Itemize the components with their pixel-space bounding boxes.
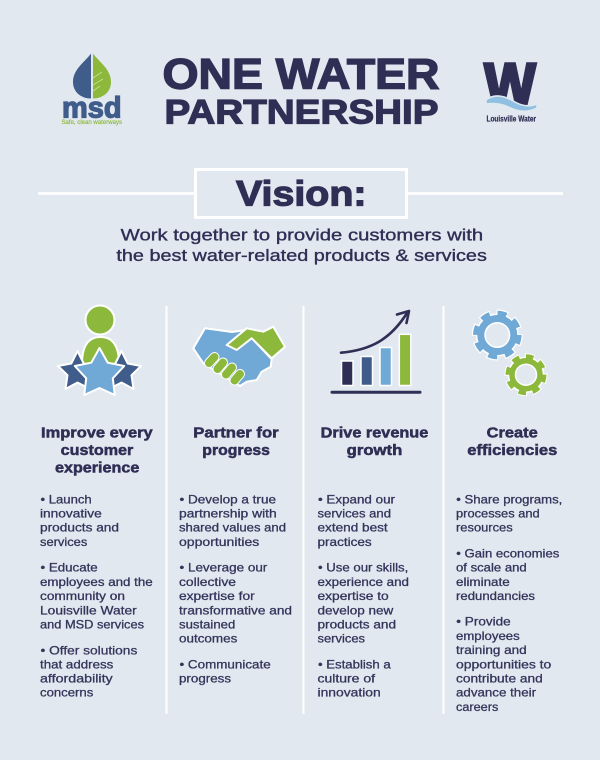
- heading: Drive revenue: [321, 426, 428, 442]
- bullet list: practices: [318, 535, 372, 549]
- heading: Create: [487, 426, 538, 442]
- heading: Improve every: [41, 426, 153, 442]
- green gear: [508, 357, 544, 393]
- panel: drive revenue growth: [318, 426, 428, 700]
- bullet list: contribute and: [456, 672, 543, 686]
- bullet list: extend best: [318, 521, 388, 535]
- heading: Partner for: [193, 426, 279, 442]
- bullet list: resources: [456, 521, 513, 535]
- bullet list: employees: [456, 629, 520, 643]
- icon: person with stars: [58, 306, 141, 395]
- bullet list: shared values and: [179, 521, 286, 535]
- icon: handshake: [193, 327, 285, 386]
- bullet list: opportunities: [179, 535, 259, 549]
- heading: progress: [202, 443, 270, 459]
- bullet list: products and: [40, 521, 119, 535]
- msd wordmark: msd: [62, 91, 122, 124]
- panel: partner for progress: [179, 426, 292, 686]
- heading: experience: [55, 461, 139, 477]
- bullet list: develop new: [318, 603, 394, 617]
- bullet list: community on: [40, 589, 125, 603]
- bullet list: expertise to: [318, 589, 389, 603]
- bullet list: that address: [40, 657, 113, 671]
- vision statement: [116, 226, 487, 265]
- bullet list: innovative: [40, 506, 102, 520]
- bullet list: transformative and: [179, 603, 292, 617]
- heading: growth: [347, 443, 402, 459]
- bullet list: and MSD services: [40, 617, 144, 631]
- icon: growth bar chart: [332, 311, 420, 392]
- bullet list: culture of: [318, 672, 376, 686]
- bullet list: redundancies: [456, 589, 535, 603]
- bullet list: opportunities to: [456, 657, 552, 671]
- blue gear: [476, 314, 519, 356]
- title: PARTNERSHIP: [164, 94, 438, 132]
- bullet list: • Share programs,: [456, 492, 562, 506]
- title: ONE WATER: [162, 51, 440, 98]
- bullet list: • Educate: [40, 561, 98, 575]
- bullet list: collective: [179, 575, 236, 589]
- vision statement: the best water-related products & services: [116, 246, 487, 265]
- msd tagline: Safe, clean waterways: [62, 119, 123, 126]
- vision heading: Vision:: [236, 175, 366, 214]
- bullet list: services: [318, 632, 365, 646]
- bullet list: [179, 492, 292, 686]
- bullet list: • Provide: [456, 615, 511, 629]
- logo: MSD: [62, 54, 123, 126]
- heading: [193, 426, 279, 459]
- green hand: [227, 327, 285, 358]
- arrow: [341, 313, 407, 353]
- vision statement: Work together to provide customers with: [121, 226, 483, 245]
- bullet list: products and: [318, 617, 396, 631]
- heading: customer: [61, 443, 134, 459]
- bullet list: eliminate: [456, 575, 510, 589]
- bullet list: advance their: [456, 686, 536, 700]
- bullet list: progress: [179, 672, 231, 686]
- bullet list: [40, 492, 153, 700]
- bullet list: partnership with: [179, 506, 277, 520]
- bullet list: • Gain economies: [456, 546, 559, 560]
- bullet list: outcomes: [179, 632, 237, 646]
- bullet list: • Communicate: [180, 657, 271, 671]
- bullet list: • Develop a true: [180, 492, 276, 506]
- bullet list: [456, 492, 562, 714]
- bullet list: services and: [318, 506, 391, 520]
- heading: [321, 426, 428, 459]
- bullet list: [318, 492, 409, 700]
- bullet list: processes and: [456, 506, 540, 520]
- icon: gears: [476, 314, 544, 393]
- bullet list: concerns: [40, 686, 93, 700]
- icon: water wave: [486, 96, 537, 111]
- bullet list: • Offer solutions: [40, 643, 137, 657]
- W mark: W: [484, 52, 536, 118]
- title: [162, 51, 440, 132]
- blue hand: [193, 328, 272, 386]
- bullet list: • Expand our: [318, 492, 395, 506]
- bullet list: careers: [456, 700, 498, 714]
- icon: leaf left half: [73, 54, 91, 98]
- bullet list: • Launch: [40, 492, 92, 506]
- fingers: [209, 357, 240, 380]
- icon: leaf right half: [93, 54, 111, 98]
- bullet list: • Establish a: [318, 657, 391, 671]
- bullet list: services: [40, 535, 87, 549]
- bullet list: expertise for: [179, 589, 255, 603]
- bullet list: experience and: [318, 575, 409, 589]
- Louisville Water label: Louisville Water: [486, 115, 536, 124]
- bullet list: employees and the: [40, 575, 153, 589]
- bullet list: of scale and: [456, 561, 527, 575]
- heading: efficiencies: [467, 443, 557, 459]
- panel: improve every customer experience: [40, 426, 153, 700]
- bullet list: sustained: [179, 617, 235, 631]
- bullet list: affordability: [40, 672, 113, 686]
- heading: [41, 426, 153, 477]
- logo: Louisville Water: [484, 52, 537, 124]
- panel: create efficiencies: [456, 426, 562, 714]
- bullet list: Louisville Water: [40, 603, 137, 617]
- bullet list: • Use our skills,: [318, 561, 408, 575]
- vision heading: [38, 170, 563, 218]
- bullet list: training and: [456, 643, 527, 657]
- bullet list: • Leverage our: [180, 561, 267, 575]
- bullet list: innovation: [318, 686, 381, 700]
- heading: [467, 426, 557, 459]
